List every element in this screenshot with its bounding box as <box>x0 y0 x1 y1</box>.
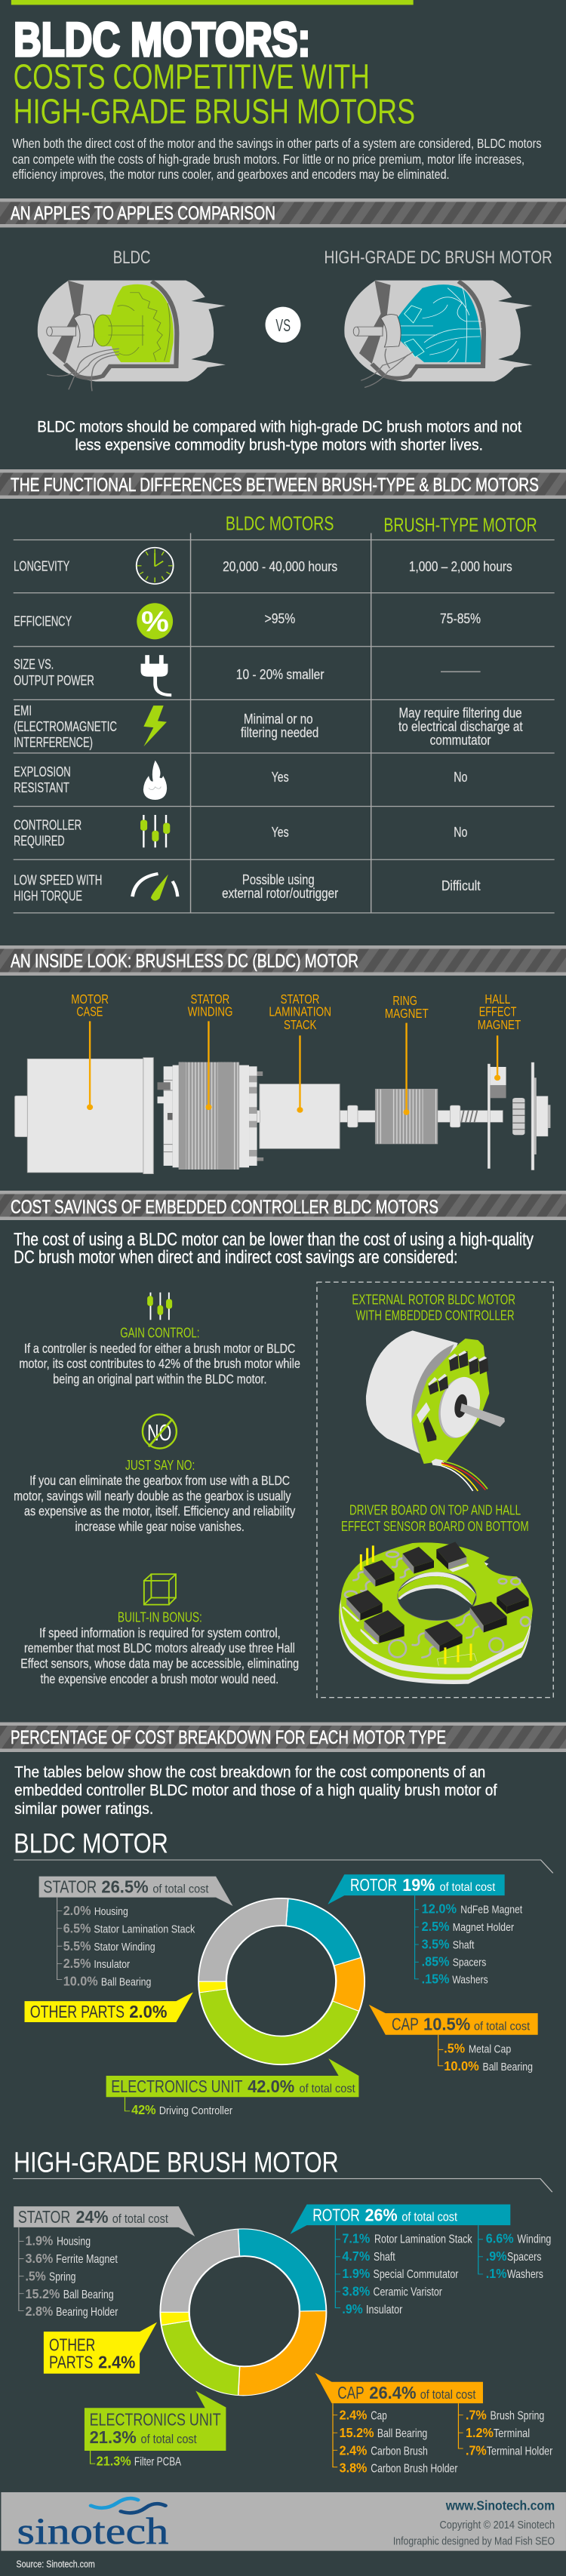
list: rotor items: Special Commutator <box>374 2267 458 2281</box>
section band: cost savings: COST SAVINGS OF EMBEDDED CONTROLLER BLDC MOTORS <box>11 1197 438 1218</box>
list: stator items: Ball Bearing <box>101 1975 151 1988</box>
list: cap items: Cap <box>371 2408 387 2422</box>
list: cap items: 2.4% <box>340 2443 368 2458</box>
list: rotor items: .9% <box>342 2302 363 2316</box>
callout: electronics unit <box>106 2058 358 2097</box>
list: cap items: .7% <box>466 2408 487 2423</box>
callout: other parts: 2.4% <box>98 2353 135 2372</box>
table values: No <box>454 824 467 841</box>
list: stator items: 3.6% <box>25 2252 54 2266</box>
list: cap items: Metal Cap <box>469 2043 511 2055</box>
label: BLDC: BLDC <box>113 247 150 267</box>
section band: inside look <box>0 945 566 976</box>
callout: rotor <box>291 2205 510 2234</box>
part: stator lamination stack <box>260 1084 340 1148</box>
callout: cap: 10.5% <box>423 2015 470 2034</box>
row labels: RESISTANT <box>14 779 69 795</box>
part labels: MOTOR <box>71 991 109 1007</box>
text block: built-in bonus: remember that most BLDC motors already use three Hall <box>24 1640 295 1655</box>
callout: other parts: 2.0% <box>129 2003 167 2021</box>
callout: other parts: PARTS <box>49 2353 93 2372</box>
row labels: CONTROLLER <box>14 817 82 833</box>
footer panel <box>1 2492 566 2553</box>
icon: percent: % <box>141 605 169 638</box>
list: rotor items: 2.5% <box>422 1920 449 1934</box>
callout: cap: 26.4% <box>369 2384 416 2402</box>
table values: external rotor/outrigger <box>222 885 338 901</box>
list: rotor items: 12.0% <box>422 1902 457 1917</box>
list: rotor items: .9% <box>486 2249 507 2264</box>
illustration: brush motor cutaway <box>344 281 532 388</box>
list: cap items: .5% <box>444 2042 465 2056</box>
callout: cap: CAP <box>337 2384 365 2402</box>
list: electronics items: Driving Controller <box>159 2104 232 2116</box>
table values: 10 - 20% smaller <box>236 667 325 683</box>
icon: controller sliders <box>147 1293 172 1320</box>
list: stator items: 1.9% <box>25 2234 54 2249</box>
title: BLDC motors: BLDC MOTORS: <box>14 13 310 66</box>
text block: built-in bonus <box>20 1610 299 1686</box>
list: cap items: 15.2% <box>340 2426 374 2440</box>
list: rotor items: 4.7% <box>342 2249 371 2264</box>
illustration: external rotor motor <box>366 1330 505 1491</box>
callout: other parts <box>25 1992 193 2022</box>
panel: cost savings <box>14 1230 553 1698</box>
callout: rotor <box>328 1874 505 1904</box>
part labels: STACK <box>284 1017 317 1032</box>
illustration: BLDC motor cutaway <box>38 281 226 391</box>
list: cap items: 10.0% <box>444 2060 479 2073</box>
heading rule <box>14 1860 553 1873</box>
list: rotor items: Spacers <box>453 1956 486 1969</box>
list: electronics items <box>91 2451 182 2469</box>
list: rotor items: Shaft <box>374 2250 395 2264</box>
list: stator items: Insulator <box>94 1958 130 1971</box>
list: stator items: .5% <box>25 2270 46 2284</box>
panel: exploded motor diagram <box>15 991 550 1174</box>
list: stator items: 2.5% <box>63 1957 91 1971</box>
table grid <box>14 533 555 913</box>
part: motor case <box>15 1058 153 1174</box>
list: rotor items: 3.8% <box>342 2285 371 2299</box>
table values: 1,000 – 2,000 hours <box>409 559 512 575</box>
section band: inside look: AN INSIDE LOOK: BRUSHLESS DC (BLDC) MOTOR <box>11 951 358 972</box>
list: rotor items: Spacers <box>507 2250 541 2264</box>
row labels: EXPLOSION <box>14 764 71 780</box>
breakdown intro: similar power ratings. <box>14 1800 153 1818</box>
section band: apples to apples <box>0 198 566 228</box>
breakdown intro <box>14 1763 497 1818</box>
list: rotor items: 6.6% <box>486 2232 514 2246</box>
text block: just say no <box>14 1458 296 1534</box>
text block: gain control <box>19 1326 300 1387</box>
row labels <box>14 558 117 904</box>
part: hall effect assembly <box>488 1062 550 1170</box>
list: stator items: Housing <box>94 1904 128 1917</box>
list: cap items: Terminal <box>494 2427 530 2439</box>
list: cap items: 1.2% <box>466 2426 494 2440</box>
callout: cap <box>369 2005 538 2035</box>
icon: clock <box>137 548 174 584</box>
donut chart <box>198 1898 365 2066</box>
list: cap items: 3.8% <box>340 2461 368 2476</box>
text block: just say no: as expensive as the motor, itself. Efficiency and reliability <box>24 1503 296 1519</box>
row labels: REQUIRED <box>14 833 65 849</box>
logo: Sinotech waves <box>91 2498 165 2513</box>
callout lines <box>88 1021 500 1114</box>
row labels: EMI <box>14 703 32 719</box>
list: rotor items: Magnet Holder <box>453 1921 514 1934</box>
callout: electronics unit: 42.0% <box>248 2076 294 2096</box>
callout: stator: 24% <box>75 2209 108 2227</box>
caption: external rotor motor <box>352 1293 515 1324</box>
list: cap items: .7% <box>466 2443 487 2458</box>
table values: 75-85% <box>440 611 481 627</box>
list: stator items: Bearing Holder <box>56 2305 118 2318</box>
table values: Difficult <box>441 878 481 894</box>
list: rotor items: 1.9% <box>342 2267 371 2282</box>
text block: gain control: If a controller is needed for either a brush motor or BLDC <box>24 1340 295 1356</box>
text block: built-in bonus: If speed information is required for system control, <box>39 1625 281 1640</box>
VS badge: VS <box>275 316 291 335</box>
icon: controller sliders <box>140 815 170 847</box>
row labels: OUTPUT POWER <box>14 672 94 688</box>
list: rotor items: 7.1% <box>342 2232 371 2246</box>
row labels: (ELECTROMAGNETIC <box>14 718 117 735</box>
row labels: LOW SPEED WITH <box>14 872 102 888</box>
part labels: LAMINATION <box>269 1004 331 1019</box>
column heading: BLDC motors: BLDC MOTORS <box>226 513 334 534</box>
text block: built-in bonus: Effect sensors, whose data may be accessible, eliminating <box>20 1655 299 1671</box>
callout: rotor: 26% <box>365 2206 398 2225</box>
callout: stator <box>39 1877 233 1906</box>
list: rotor items: Washers <box>452 1973 488 1986</box>
text block: gain control: being an original part within the BLDC motor. <box>53 1371 266 1387</box>
list: cap items: Carbon Brush Holder <box>371 2461 457 2475</box>
callout: rotor: of total cost <box>440 1881 496 1894</box>
icon: flame <box>143 761 167 800</box>
list: rotor items: Insulator <box>366 2303 402 2316</box>
statement text <box>37 417 521 454</box>
intro paragraph <box>12 137 542 183</box>
callout: rotor: 19% <box>402 1876 435 1895</box>
table values: No <box>454 769 467 785</box>
part: ring magnet <box>375 1089 438 1144</box>
part labels: EFFECT <box>479 1004 517 1019</box>
text block: gain control: GAIN CONTROL: <box>120 1326 199 1342</box>
panel: BLDC cost breakdown <box>14 1763 553 2117</box>
icon: no gearbox: NO <box>147 1420 171 1446</box>
callout: electronics unit: ELECTRONICS UNIT <box>90 2411 221 2430</box>
donut chart <box>159 2228 328 2396</box>
callout: stator: STATOR <box>18 2209 70 2227</box>
list: stator items: 15.2% <box>25 2287 60 2301</box>
row labels: EFFICIENCY <box>14 613 72 629</box>
part labels: MAGNET <box>385 1006 429 1021</box>
section band: apples to apples: AN APPLES TO APPLES COMPARISON <box>11 203 275 224</box>
part labels <box>71 991 521 1032</box>
heading rule <box>13 2178 552 2192</box>
list: stator items: 6.5% <box>63 1922 91 1936</box>
text block: just say no: motor, savings will nearly double as the gearbox is usually <box>14 1488 291 1503</box>
list: electronics items <box>125 2097 232 2117</box>
part labels: HALL <box>484 991 510 1007</box>
list: cap items: Carbon Brush <box>371 2444 428 2458</box>
icon: no gearbox <box>143 1415 177 1449</box>
callout: cap: CAP <box>392 2015 419 2034</box>
icon: plug <box>141 655 171 695</box>
dashed panel frame <box>317 1282 553 1698</box>
part labels: CASE <box>76 1004 103 1019</box>
part: stator winding <box>158 1062 263 1170</box>
cost savings intro <box>14 1230 534 1268</box>
callout: stator: STATOR <box>43 1877 97 1897</box>
list: stator items: 10.0% <box>63 1975 98 1989</box>
callout: stator: of total cost <box>112 2212 169 2226</box>
part labels: STATOR <box>281 991 319 1007</box>
text block: just say no: JUST SAY NO: <box>125 1458 195 1474</box>
list: cap items <box>438 2035 533 2073</box>
callout: other parts: OTHER <box>49 2336 95 2355</box>
list: rotor items: .1% <box>486 2267 507 2282</box>
callout: stator <box>14 2206 195 2236</box>
text block: built-in bonus: BUILT-IN BONUS: <box>118 1610 202 1626</box>
green top bar <box>11 0 414 5</box>
illustration: driver board <box>339 1542 533 1684</box>
table values: Possible using <box>242 871 315 887</box>
callout: cap: of total cost <box>420 2387 476 2402</box>
list: rotor items: .85% <box>422 1955 449 1969</box>
callout: stator: of total cost <box>152 1883 209 1896</box>
list: stator items: Spring <box>49 2270 75 2283</box>
text block: gain control: motor, its cost contributes to 42% of the brush motor while <box>19 1355 300 1371</box>
table values: commutator <box>430 732 491 749</box>
header: title and introduction <box>11 0 542 183</box>
dash value: not applicable <box>441 671 481 672</box>
panel: comparison table <box>14 513 555 913</box>
list: cap items <box>333 2403 552 2476</box>
list: rotor items <box>415 1895 522 1987</box>
icon: lightning bolt <box>143 705 167 746</box>
subtitle line 1: COSTS COMPETITIVE WITH <box>14 57 370 97</box>
list: electronics items: 42% <box>131 2104 156 2117</box>
list: stator items: Housing <box>57 2235 91 2248</box>
panel: motor comparison <box>37 247 552 454</box>
list: electronics items: 21.3% <box>97 2455 131 2469</box>
list: electronics items: Filter PCBA <box>134 2455 182 2468</box>
heading: high-grade brush motor: HIGH-GRADE BRUSH MOTOR <box>14 2147 339 2178</box>
icon: cube <box>144 1574 176 1605</box>
list: stator items: 5.5% <box>63 1940 91 1954</box>
text block: just say no: If you can eliminate the gearbox from use with a BLDC <box>29 1473 290 1488</box>
list: stator items <box>19 2227 118 2319</box>
list: stator items: 2.8% <box>25 2304 54 2319</box>
callout: rotor: ROTOR <box>350 1876 397 1895</box>
callout: stator: 26.5% <box>101 1877 149 1897</box>
table values: Yes <box>272 824 289 841</box>
panel: brush motor cost breakdown <box>1 2147 566 2570</box>
callout: rotor: ROTOR <box>312 2206 360 2225</box>
list: stator items: 2.0% <box>63 1904 91 1918</box>
row labels: SIZE VS. <box>14 656 54 672</box>
text block: built-in bonus: the expensive encoder a brush motor would need. <box>41 1671 278 1686</box>
table values <box>222 559 523 901</box>
VS badge <box>266 307 300 343</box>
row labels: HIGH TORQUE <box>14 888 82 904</box>
table values: filtering needed <box>241 725 318 741</box>
list: cap items: 2.4% <box>340 2408 368 2423</box>
list: stator items <box>57 1898 195 1989</box>
callout: rotor: of total cost <box>401 2210 458 2224</box>
list: stator items: Stator Lamination Stack <box>94 1923 195 1935</box>
part labels: STATOR <box>191 991 229 1007</box>
table values: >95% <box>265 611 295 627</box>
source line: Source: Sinotech.com <box>17 2559 95 2570</box>
list: rotor items: Ceramic Varistor <box>374 2286 442 2298</box>
section band: cost breakdown <box>0 1722 566 1752</box>
list: stator items: Ball Bearing <box>63 2288 114 2301</box>
callout: electronics unit: of total cost <box>141 2432 197 2445</box>
table values: Minimal or no <box>244 712 313 727</box>
part: shaft <box>257 1105 503 1127</box>
list: cap items: Ball Bearing <box>482 2061 533 2073</box>
text block: just say no: increase while gear noise vanishes. <box>75 1518 245 1534</box>
list: rotor items: .15% <box>422 1972 449 1987</box>
callout: electronics unit: ELECTRONICS UNIT <box>111 2076 242 2096</box>
list: rotor items: NdFeB Magnet <box>460 1903 522 1916</box>
list: rotor items: Shaft <box>453 1938 475 1951</box>
callout: other parts: OTHER PARTS <box>30 2003 125 2021</box>
callout: other parts <box>44 2322 157 2374</box>
part labels: WINDING <box>188 1004 233 1019</box>
list: rotor items: 3.5% <box>422 1938 449 1952</box>
part labels: MAGNET <box>478 1017 521 1032</box>
list: cap items: Ball Bearing <box>377 2427 427 2439</box>
callout: electronics unit: of total cost <box>300 2082 355 2095</box>
caption: driver board <box>341 1503 529 1535</box>
callout: cap: of total cost <box>474 2020 531 2033</box>
list: rotor items: Rotor Lamination Stack <box>374 2233 472 2246</box>
table values: Yes <box>272 769 289 785</box>
callout: cap <box>315 2373 483 2403</box>
list: stator items: Stator Winding <box>94 1940 155 1953</box>
callout: electronics unit <box>85 2390 226 2451</box>
row labels: INTERFERENCE) <box>14 734 93 750</box>
callout: electronics unit: 21.3% <box>90 2429 137 2447</box>
list: stator items: Ferrite Magnet <box>56 2252 118 2265</box>
heading: BLDC motor: BLDC MOTOR <box>14 1828 168 1859</box>
part labels: RING <box>392 993 417 1008</box>
logo: Sinotech wordmark: sinotech <box>17 2510 168 2553</box>
list: rotor items <box>335 2225 551 2316</box>
icon: speed gauge <box>133 874 177 901</box>
table values: 20,000 - 40,000 hours <box>223 559 337 575</box>
list: rotor items: Washers <box>507 2267 543 2281</box>
row labels: LONGEVITY <box>14 558 70 574</box>
